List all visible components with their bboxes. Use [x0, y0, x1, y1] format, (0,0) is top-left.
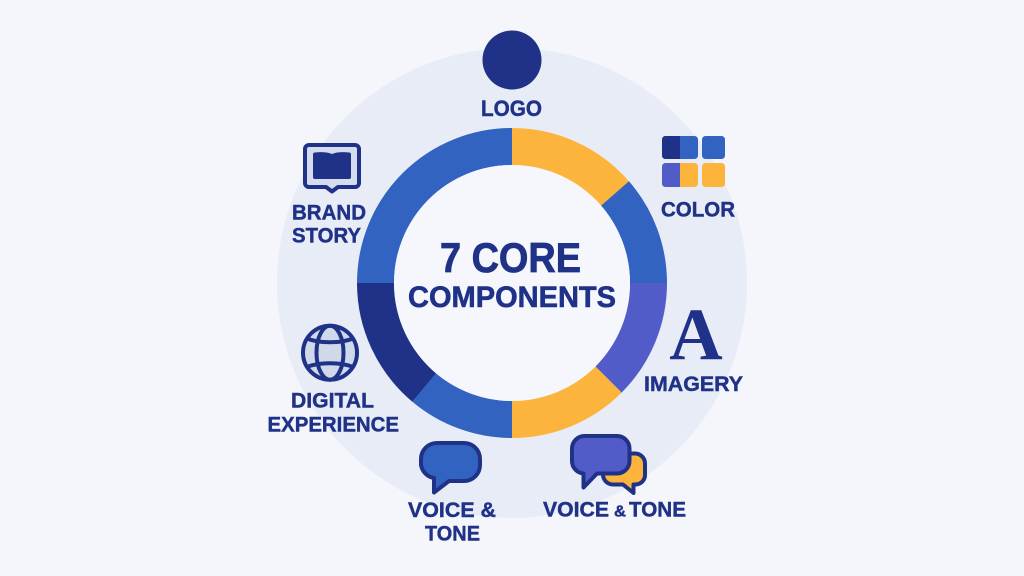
icon: logo circle: [482, 30, 542, 90]
imagery item: [644, 294, 743, 396]
brand story item: [292, 145, 366, 248]
icon: color swatches: [662, 136, 725, 187]
label: voice and tone: TONE: [425, 522, 480, 546]
center title: COMPONENTS: [408, 281, 616, 314]
logo item: [481, 30, 542, 121]
label: voice and tone: VOICE &: [408, 498, 496, 522]
label: imagery: IMAGERY: [644, 372, 743, 396]
label: digital experience: DIGITAL: [291, 388, 374, 412]
label: color: COLOR: [661, 198, 735, 222]
label: logo: LOGO: [481, 96, 542, 121]
center title: 7 CORE: [440, 234, 581, 281]
icon: globe: [303, 326, 357, 380]
icon: serif letter A: A: [669, 294, 723, 376]
label: voice and tone: [408, 498, 496, 546]
color item: [661, 136, 735, 222]
label: voice and tone: VOICE: [543, 498, 609, 522]
label: brand story: BRAND: [292, 200, 366, 224]
digital experience item: [268, 326, 399, 437]
voice and tone item, left: [408, 443, 496, 546]
icon: speech bubble: [421, 443, 480, 492]
label: digital experience: [268, 388, 399, 437]
label: voice and tone: TONE: [629, 498, 686, 522]
label: brand story: STORY: [292, 224, 361, 248]
icon: double speech bubbles: [572, 436, 645, 493]
icon: book badge: [305, 145, 359, 192]
voice and tone item, right: [543, 436, 686, 522]
donut ring: seven segments: [319, 90, 705, 476]
label: digital experience: EXPERIENCE: [268, 413, 399, 437]
label: voice and tone: [543, 498, 686, 522]
center title: [394, 165, 630, 401]
label: voice and tone: &: [614, 504, 626, 521]
label: brand story: [292, 200, 366, 248]
